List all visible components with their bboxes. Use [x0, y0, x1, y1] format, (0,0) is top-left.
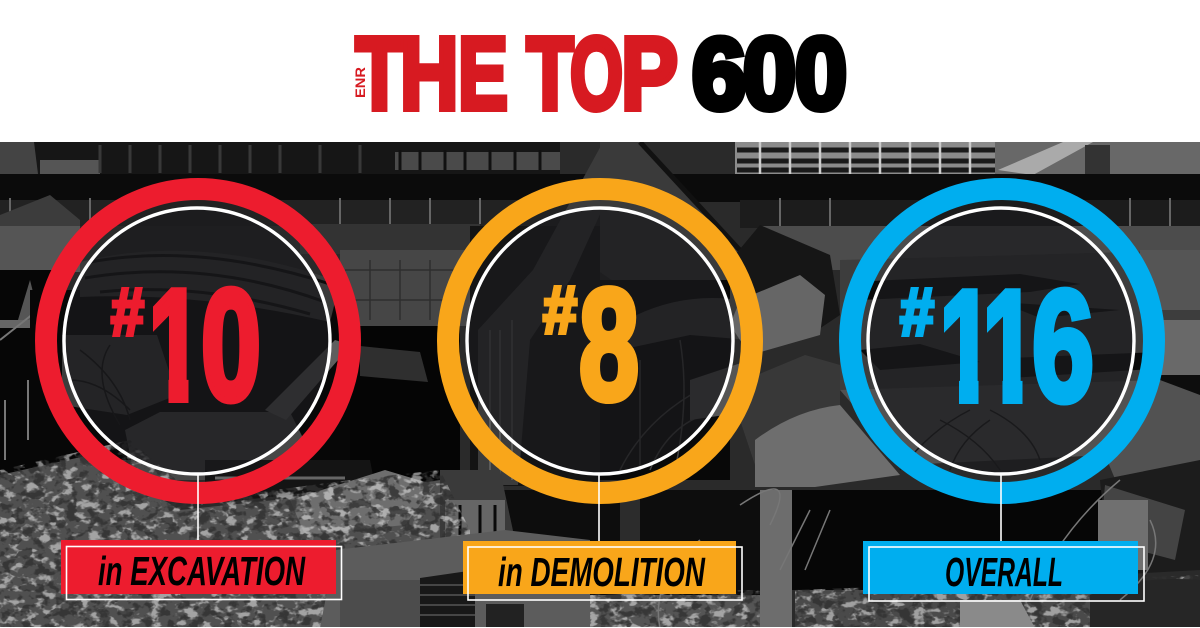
- logo text: 600: 0: [743, 18, 796, 130]
- logo text: THE TOP: T: [356, 16, 404, 131]
- logo text: 600: 6: [692, 18, 746, 130]
- ranking: #10 in excavation: [46, 189, 350, 600]
- construction machine, lower center: [320, 530, 590, 628]
- ranking: #10 in excavation: in EXCAVATION: [98, 548, 306, 594]
- number #10: 1: [148, 258, 202, 434]
- background photo: demolition site: [0, 142, 1200, 628]
- number #116: [899, 286, 1092, 406]
- number #8: #: [543, 272, 577, 348]
- connector line: [1000, 475, 1002, 547]
- center-right concrete: [735, 225, 840, 335]
- number #116: 1: [982, 258, 1036, 434]
- ranking: #116 overall: OVERALL: [945, 549, 1063, 595]
- rubble textures: [0, 441, 1198, 627]
- logo text: THE TOP: [356, 16, 678, 131]
- label box: in DEMOLITION: [463, 541, 736, 594]
- right side slabs: [840, 250, 1200, 390]
- rubble bases low right: [590, 595, 760, 628]
- number #10: [110, 286, 259, 404]
- ranking: #116 overall: [850, 189, 1154, 601]
- inner dark disc with white outline: [868, 208, 1134, 474]
- number #116: 6: [1032, 258, 1094, 434]
- inner dark disc with white outline: [64, 208, 330, 474]
- connector line: [598, 475, 600, 546]
- header: THE TOP 600 logo: [352, 16, 847, 131]
- label box: OVERALL: [863, 541, 1138, 594]
- blue ring: [850, 189, 1154, 493]
- logo text: ENR: ENR: [352, 67, 368, 98]
- inner dark disc with white outline: [467, 208, 733, 474]
- logo text: 600: 0: [795, 18, 847, 130]
- number #10: 0: [201, 258, 261, 434]
- red ring: [46, 189, 350, 493]
- orange ring: [448, 189, 752, 493]
- number #116: 1: [940, 258, 994, 434]
- ranking: #8 in demolition: in DEMOLITION: [498, 549, 706, 595]
- logo text: 600: [692, 18, 847, 130]
- center boom and cables: [470, 226, 600, 486]
- number #8: [543, 257, 639, 433]
- connector line: [197, 475, 199, 546]
- logo text: THE TOP: P: [621, 16, 678, 131]
- number #116: #: [900, 274, 934, 350]
- logo text: THE TOP: H: [400, 16, 458, 131]
- ranking: #8 in demolition: [448, 189, 752, 600]
- logo text: THE TOP: O: [570, 16, 623, 131]
- rubble left: [0, 455, 470, 628]
- logo text: THE TOP: E: [458, 16, 508, 131]
- number #8: 8: [579, 257, 639, 433]
- label box: in EXCAVATION: [61, 540, 336, 594]
- logo text: THE TOP: T: [526, 16, 574, 131]
- number #10: #: [111, 274, 144, 350]
